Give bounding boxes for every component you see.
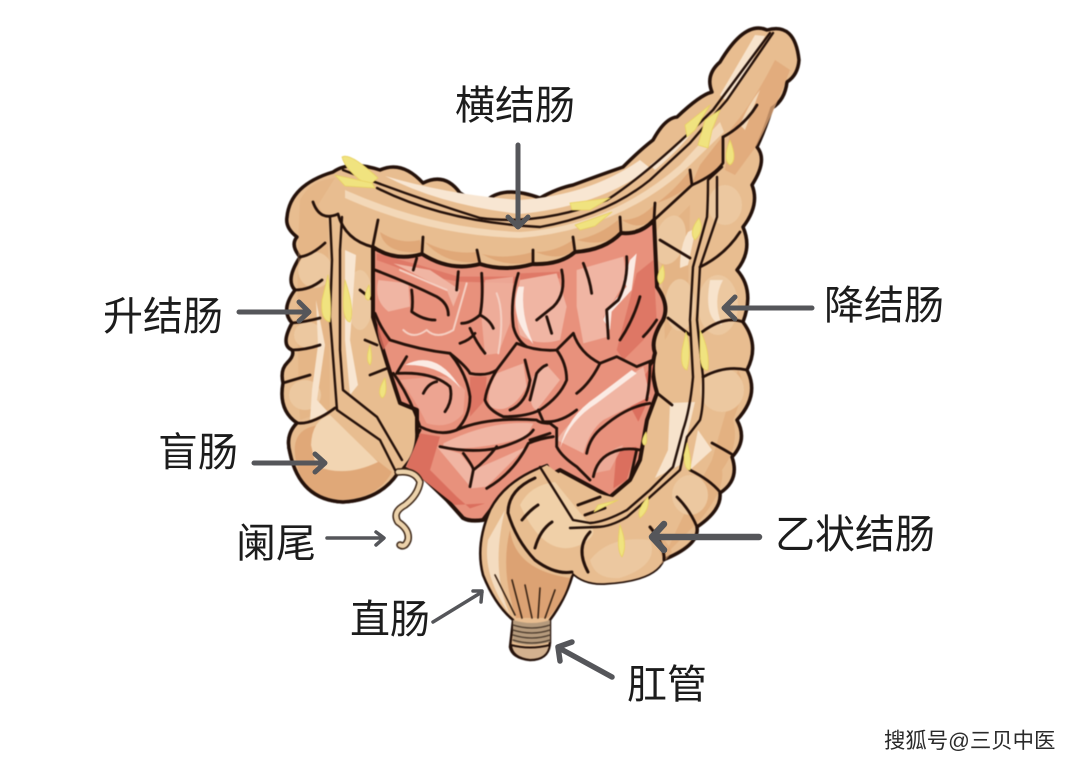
small intestine (373, 220, 665, 521)
colon shading (298, 60, 790, 575)
intestine light tones (377, 257, 650, 488)
intestine fold lines (375, 257, 657, 497)
colon highlights (310, 35, 765, 478)
arrow: ascending colon (239, 302, 309, 321)
label: rectum: 直肠 (350, 598, 430, 642)
small intestine body (373, 220, 665, 521)
rectum (480, 465, 590, 660)
sigmoid colon (508, 465, 664, 583)
arrow: descending colon (724, 297, 812, 319)
label: transverse colon: 横结肠 (455, 84, 575, 128)
rectum body (480, 465, 590, 660)
label: ascending colon: 升结肠 (103, 295, 223, 339)
arrow: appendix (327, 532, 384, 545)
sigmoid lobe shade (590, 539, 652, 578)
fat deposits (322, 105, 734, 557)
intestine white highlights (405, 253, 637, 448)
anal canal (511, 620, 550, 660)
label: descending colon: 降结肠 (824, 284, 944, 328)
arrow: cecum (254, 454, 325, 472)
arrow: transverse colon (508, 145, 528, 227)
rectum shading (506, 530, 570, 618)
rectum folds (495, 575, 555, 618)
colon lobes (289, 185, 744, 574)
cecum outline (289, 423, 398, 502)
cecum body (289, 408, 415, 502)
sigmoid fold lines (508, 478, 664, 572)
label: appendix: 阑尾 (236, 522, 316, 566)
intestine dark tones (377, 253, 657, 508)
label: cecum: 盲肠 (158, 431, 238, 475)
colon seam lines (330, 33, 773, 528)
cecum (289, 408, 415, 502)
arrow: rectum (433, 591, 482, 622)
appendix fill (396, 472, 420, 546)
arrow: sigmoid colon (652, 524, 759, 550)
cecum shading (295, 425, 392, 500)
intestine detail, positioned at 1/3 scale (375, 253, 657, 508)
appendix (396, 472, 420, 546)
label: sigmoid colon: 乙状结肠 (775, 513, 935, 557)
colon fold lines (283, 105, 757, 527)
label: anal canal: 肛管 (627, 663, 707, 707)
large intestine illustration (282, 28, 799, 660)
anal canal ring lines (513, 625, 550, 643)
colon silhouette (282, 28, 799, 583)
anal canal base (511, 645, 550, 660)
cecum highlight (311, 415, 378, 471)
anal canal rings (513, 620, 550, 645)
sigmoid lobes (508, 465, 663, 583)
watermark: 搜狐号@三贝中医 (884, 729, 1055, 753)
arrow: anal canal (558, 642, 612, 677)
rectum highlight (487, 510, 510, 615)
intestine highlights (400, 270, 501, 353)
sigmoid lobe highlight (520, 482, 593, 548)
